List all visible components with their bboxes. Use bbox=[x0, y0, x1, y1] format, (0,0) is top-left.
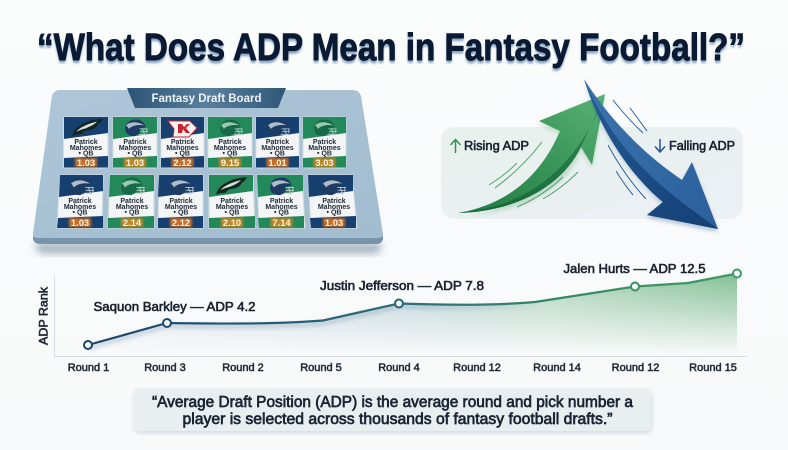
card row 1, card 3: Patrick bbox=[171, 139, 194, 146]
card row 1, card 4 bbox=[208, 117, 252, 168]
line bbox=[88, 274, 737, 345]
x axis labels: Round 15 bbox=[689, 362, 737, 374]
label: rising ADP: Rising ADP bbox=[464, 138, 529, 153]
card row 2, card 2: 2.14 bbox=[123, 217, 142, 228]
card row 1, card 5 bbox=[256, 117, 299, 168]
card row 1, card 4: Mahomes bbox=[214, 145, 246, 152]
card row 2, card 5: Patrick bbox=[270, 198, 293, 205]
board heading tab bbox=[127, 88, 286, 108]
card row 1, card 2: 1.03 bbox=[126, 157, 144, 168]
y axis title: ADP Rank bbox=[38, 287, 50, 345]
panel: fantasy draft board bbox=[33, 88, 383, 254]
card row 2, card 1: Mahomes bbox=[64, 204, 96, 211]
data points bbox=[84, 270, 741, 349]
card row 1, card 1: • QB bbox=[79, 150, 93, 158]
card row 2, card 6: • QB bbox=[327, 210, 341, 216]
card row 2, card 6: 1.03 bbox=[325, 217, 343, 228]
card row 2, card 1: Patrick bbox=[68, 198, 92, 205]
x axis labels: Round 2 bbox=[222, 362, 264, 374]
x axis labels: Round 14 bbox=[533, 362, 581, 374]
card row 2, card 2 bbox=[108, 175, 154, 228]
callout: Saquon Barkley: Saquon Barkley — ADP 4.2 bbox=[94, 299, 256, 314]
card row 1, card 2 bbox=[113, 117, 157, 168]
callout: Jalen Hurts: Jalen Hurts — ADP 12.5 bbox=[564, 261, 706, 276]
card row 2, card 3: Patrick bbox=[169, 198, 193, 205]
card row 1, card 3 bbox=[161, 117, 204, 168]
card row 1, card 5: • QB bbox=[270, 150, 285, 158]
callout: ADP definition: “Average Draft Position (ADP) is the average round and pick number a bbox=[152, 394, 633, 411]
card row 2, card 3 bbox=[158, 175, 203, 228]
card row 2, card 1: • QB bbox=[73, 210, 87, 216]
card row 2, card 4 bbox=[209, 175, 255, 228]
panel: rising and falling ADP bbox=[441, 79, 743, 232]
card row 2, card 1 bbox=[57, 175, 103, 228]
x axis labels: Round 12 bbox=[453, 362, 501, 374]
callout: ADP definition: player is selected across thousands of fantasy football drafts.” bbox=[182, 411, 612, 428]
card row 2, card 6: Mahomes bbox=[318, 204, 350, 211]
x axis labels: Round 5 bbox=[300, 362, 342, 374]
card row 2, card 5: Mahomes bbox=[265, 204, 298, 211]
board top bbox=[33, 90, 383, 238]
card row 2, card 6: Patrick bbox=[322, 198, 346, 205]
card row 2, card 3: 2.12 bbox=[172, 217, 190, 228]
card row 1, card 1 bbox=[64, 117, 108, 168]
card row 1, card 6: 3.03 bbox=[315, 157, 334, 168]
card row 1, card 2: • QB bbox=[128, 150, 142, 158]
card row 1, card 6: • QB bbox=[317, 150, 332, 158]
card row 2, card 5: 7.14 bbox=[272, 217, 291, 228]
card row 1, card 4: Patrick bbox=[218, 139, 242, 146]
x axis labels: Round 12 bbox=[612, 362, 659, 374]
arrow: rising bbox=[458, 94, 605, 217]
card row 1, card 1: 1.03 bbox=[77, 157, 95, 168]
card row 1, card 5: 1.01 bbox=[268, 157, 287, 168]
card row 2, card 6 bbox=[308, 175, 357, 228]
card row 2, card 3: • QB bbox=[174, 210, 188, 216]
chart: ADP rank line bbox=[38, 261, 747, 374]
card row 1, card 2: Patrick bbox=[123, 139, 147, 146]
blue motion lines bbox=[608, 100, 647, 199]
card row 1, card 6: Mahomes bbox=[308, 145, 341, 152]
card row 2, card 2: Mahomes bbox=[116, 204, 148, 211]
card row 1, card 1: Patrick bbox=[74, 139, 98, 146]
card row 1, card 5: Mahomes bbox=[261, 145, 294, 152]
card row 1, card 6 bbox=[303, 117, 346, 168]
panel background bbox=[441, 127, 743, 219]
x axis labels: Round 4 bbox=[378, 362, 420, 374]
callout: Justin Jefferson: Justin Jefferson — ADP 7.8 bbox=[320, 278, 484, 293]
card row 1, card 3: • QB bbox=[175, 150, 190, 158]
board side bbox=[33, 236, 383, 244]
line shadow bbox=[88, 305, 535, 348]
x axis labels bbox=[68, 362, 737, 374]
callout: ADP definition bbox=[133, 388, 652, 433]
card row 1, card 3: Mahomes bbox=[166, 145, 199, 152]
label: falling ADP: Falling ADP bbox=[669, 138, 735, 153]
card row 2, card 2: Patrick bbox=[120, 198, 144, 205]
card row 1, card 3: 2.12 bbox=[173, 157, 192, 168]
arrow: falling bbox=[584, 79, 718, 232]
axes bbox=[54, 275, 747, 356]
card row 1, card 5: Patrick bbox=[266, 139, 289, 146]
card row 1, card 4: 9.15 bbox=[221, 157, 239, 168]
card row 1, card 4: • QB bbox=[223, 150, 237, 158]
card row 2, card 4: Mahomes bbox=[216, 204, 248, 211]
card row 1, card 1: Mahomes bbox=[70, 145, 102, 152]
icon: arrowhead logo bbox=[168, 121, 197, 137]
area under line bbox=[141, 276, 737, 348]
x axis labels: Round 3 bbox=[144, 362, 186, 374]
card row 2, card 4: • QB bbox=[225, 210, 239, 216]
card row 2, card 5 bbox=[257, 175, 305, 228]
green motion lines bbox=[489, 142, 578, 207]
card row 2, card 4: Patrick bbox=[220, 198, 244, 205]
board shadow bbox=[33, 243, 383, 254]
board heading tab: Fantasy Draft Board bbox=[152, 92, 262, 105]
card row 2, card 2: • QB bbox=[125, 210, 139, 216]
card row 2, card 4: 2.10 bbox=[223, 217, 241, 228]
card row 2, card 3: Mahomes bbox=[165, 204, 197, 211]
card row 2, card 1: 1.03 bbox=[71, 217, 89, 228]
card row 2, card 5: • QB bbox=[274, 210, 289, 216]
card row 1, card 2: Mahomes bbox=[119, 145, 151, 152]
card row 1, card 6: Patrick bbox=[313, 139, 336, 146]
x axis labels: Round 1 bbox=[68, 362, 109, 374]
